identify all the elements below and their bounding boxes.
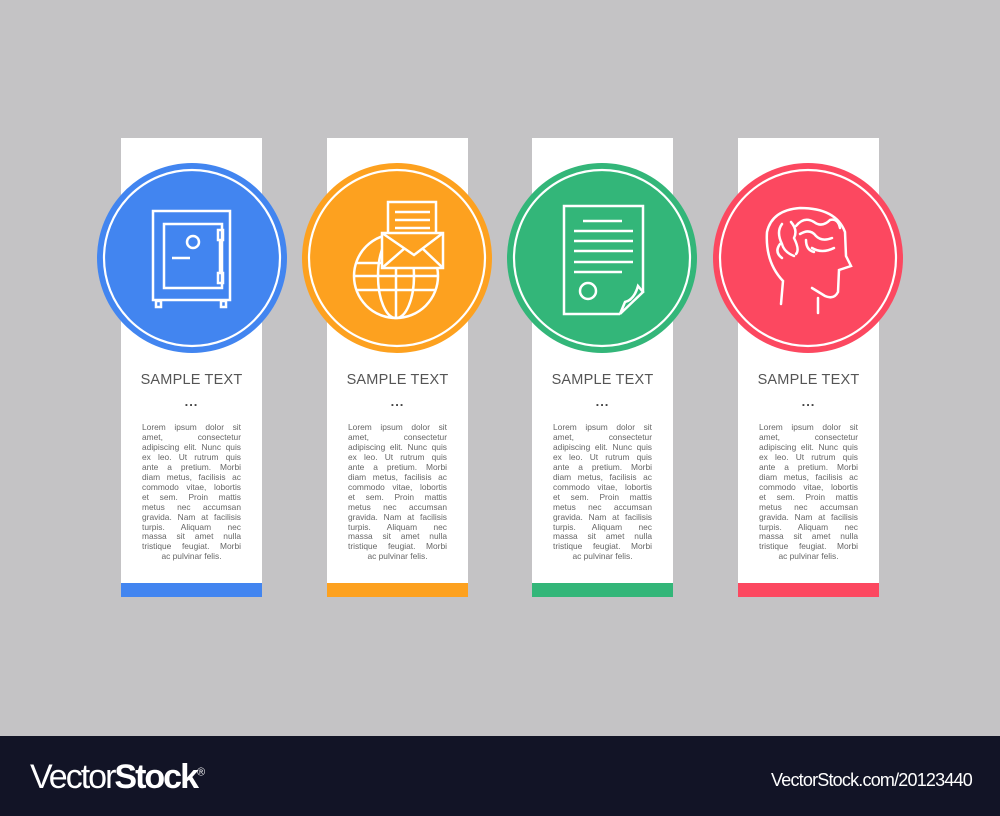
body 4: tristique feugiat. Morbi <box>759 541 858 551</box>
body 3 <box>553 422 652 561</box>
body 1: turpis. Aliquam nec <box>142 522 241 532</box>
title 1: SAMPLE TEXT <box>141 372 242 388</box>
body 4: turpis. Aliquam nec <box>759 522 858 532</box>
body 1: metus nec accumsan <box>142 502 241 512</box>
title 3: SAMPLE TEXT <box>552 372 653 388</box>
body 3: turpis. Aliquam nec <box>553 522 652 532</box>
body 2: ex leo. Ut rutrum quis <box>348 452 447 462</box>
body 2: et sem. Proin mattis <box>348 492 447 502</box>
body 1: massa sit amet nulla <box>142 531 241 541</box>
body 2: diam metus, facilisis ac <box>348 472 447 482</box>
body 2: adipiscing elit. Nunc quis <box>348 442 447 452</box>
body 3: diam metus, facilisis ac <box>553 472 652 482</box>
body 2: tristique feugiat. Morbi <box>348 541 447 551</box>
footer <box>0 736 1000 816</box>
body 1: adipiscing elit. Nunc quis <box>142 442 241 452</box>
body 2: gravida. Nam at facilisis <box>348 512 447 522</box>
body 1: ante a pretium. Morbi <box>142 462 241 472</box>
body 1: gravida. Nam at facilisis <box>142 512 241 522</box>
card 4 <box>738 138 879 597</box>
card 2 <box>327 138 468 597</box>
body 3: adipiscing elit. Nunc quis <box>553 442 652 452</box>
body 3: metus nec accumsan <box>553 502 652 512</box>
body 1: et sem. Proin mattis <box>142 492 241 502</box>
dots 2: ... <box>391 394 404 409</box>
circle 1 with safe icon <box>97 163 287 353</box>
dots 4: ... <box>802 394 815 409</box>
body 2: massa sit amet nulla <box>348 531 447 541</box>
body 4: adipiscing elit. Nunc quis <box>759 442 858 452</box>
body 4: ex leo. Ut rutrum quis <box>759 452 858 462</box>
body 4: metus nec accumsan <box>759 502 858 512</box>
body 4: amet, consectetur <box>759 432 858 442</box>
body 4: commodo vitae, lobortis <box>759 482 858 492</box>
body 3: et sem. Proin mattis <box>553 492 652 502</box>
dots 3: ... <box>596 394 609 409</box>
body 1: ex leo. Ut rutrum quis <box>142 452 241 462</box>
circle 4 with head icon <box>713 163 903 353</box>
body 3: Lorem ipsum dolor sit <box>553 422 652 432</box>
body 2: ante a pretium. Morbi <box>348 462 447 472</box>
title 4: SAMPLE TEXT <box>758 372 859 388</box>
body 3: gravida. Nam at facilisis <box>553 512 652 522</box>
body 3: amet, consectetur <box>553 432 652 442</box>
circle 3 with document icon <box>507 163 697 353</box>
card 1 <box>121 138 262 597</box>
body 3: massa sit amet nulla <box>553 531 652 541</box>
body 1: tristique feugiat. Morbi <box>142 541 241 551</box>
body 3: commodo vitae, lobortis <box>553 482 652 492</box>
body 4: gravida. Nam at facilisis <box>759 512 858 522</box>
body 3: tristique feugiat. Morbi <box>553 541 652 551</box>
body 2: turpis. Aliquam nec <box>348 522 447 532</box>
body 4: diam metus, facilisis ac <box>759 472 858 482</box>
body 4 <box>759 422 858 561</box>
body 1: diam metus, facilisis ac <box>142 472 241 482</box>
body 4: ac pulvinar felis. <box>778 551 839 561</box>
title 2: SAMPLE TEXT <box>347 372 448 388</box>
body 3: ex leo. Ut rutrum quis <box>553 452 652 462</box>
body 3: ac pulvinar felis. <box>572 551 633 561</box>
body 2: amet, consectetur <box>348 432 447 442</box>
body 1: commodo vitae, lobortis <box>142 482 241 492</box>
card 3 <box>532 138 673 597</box>
body 3: ante a pretium. Morbi <box>553 462 652 472</box>
dots 1: ... <box>185 394 198 409</box>
body 4: et sem. Proin mattis <box>759 492 858 502</box>
body 2: metus nec accumsan <box>348 502 447 512</box>
body 2: ac pulvinar felis. <box>367 551 428 561</box>
body 2: commodo vitae, lobortis <box>348 482 447 492</box>
body 1: amet, consectetur <box>142 432 241 442</box>
body 4: massa sit amet nulla <box>759 531 858 541</box>
circle 2 with mail globe icon <box>302 163 492 353</box>
body 1: ac pulvinar felis. <box>161 551 222 561</box>
body 1: Lorem ipsum dolor sit <box>142 422 241 432</box>
body 4: ante a pretium. Morbi <box>759 462 858 472</box>
body 2 <box>348 422 448 561</box>
body 4: Lorem ipsum dolor sit <box>759 422 858 432</box>
logo: VectorStock® <box>30 758 203 796</box>
body 2: Lorem ipsum dolor sit <box>348 422 447 432</box>
body 1 <box>142 422 242 561</box>
url: VectorStock.com/20123440 <box>771 770 972 790</box>
